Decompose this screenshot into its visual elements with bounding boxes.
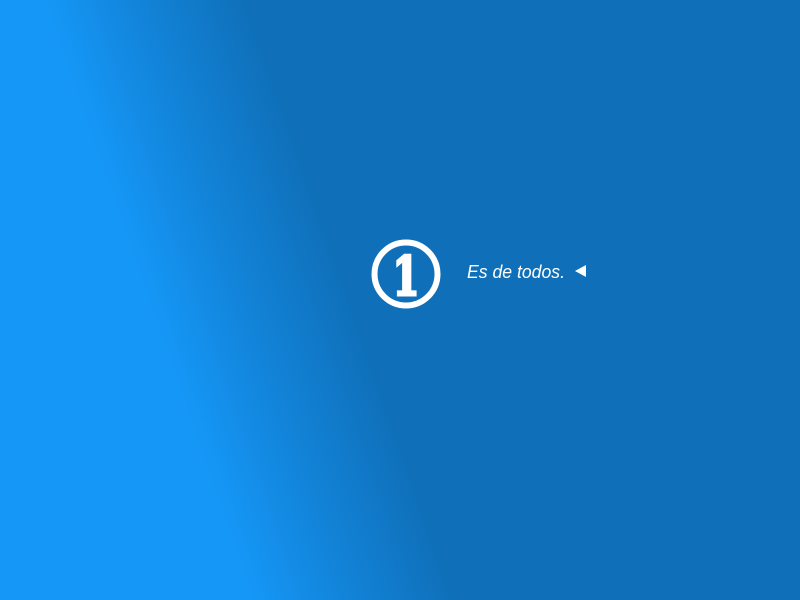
caption text: Es de todos. <box>467 262 565 282</box>
icon: numbered circle <box>374 242 438 308</box>
icon: numbered circle: 1 <box>393 246 419 308</box>
arrow: left-pointing marker <box>575 265 586 277</box>
